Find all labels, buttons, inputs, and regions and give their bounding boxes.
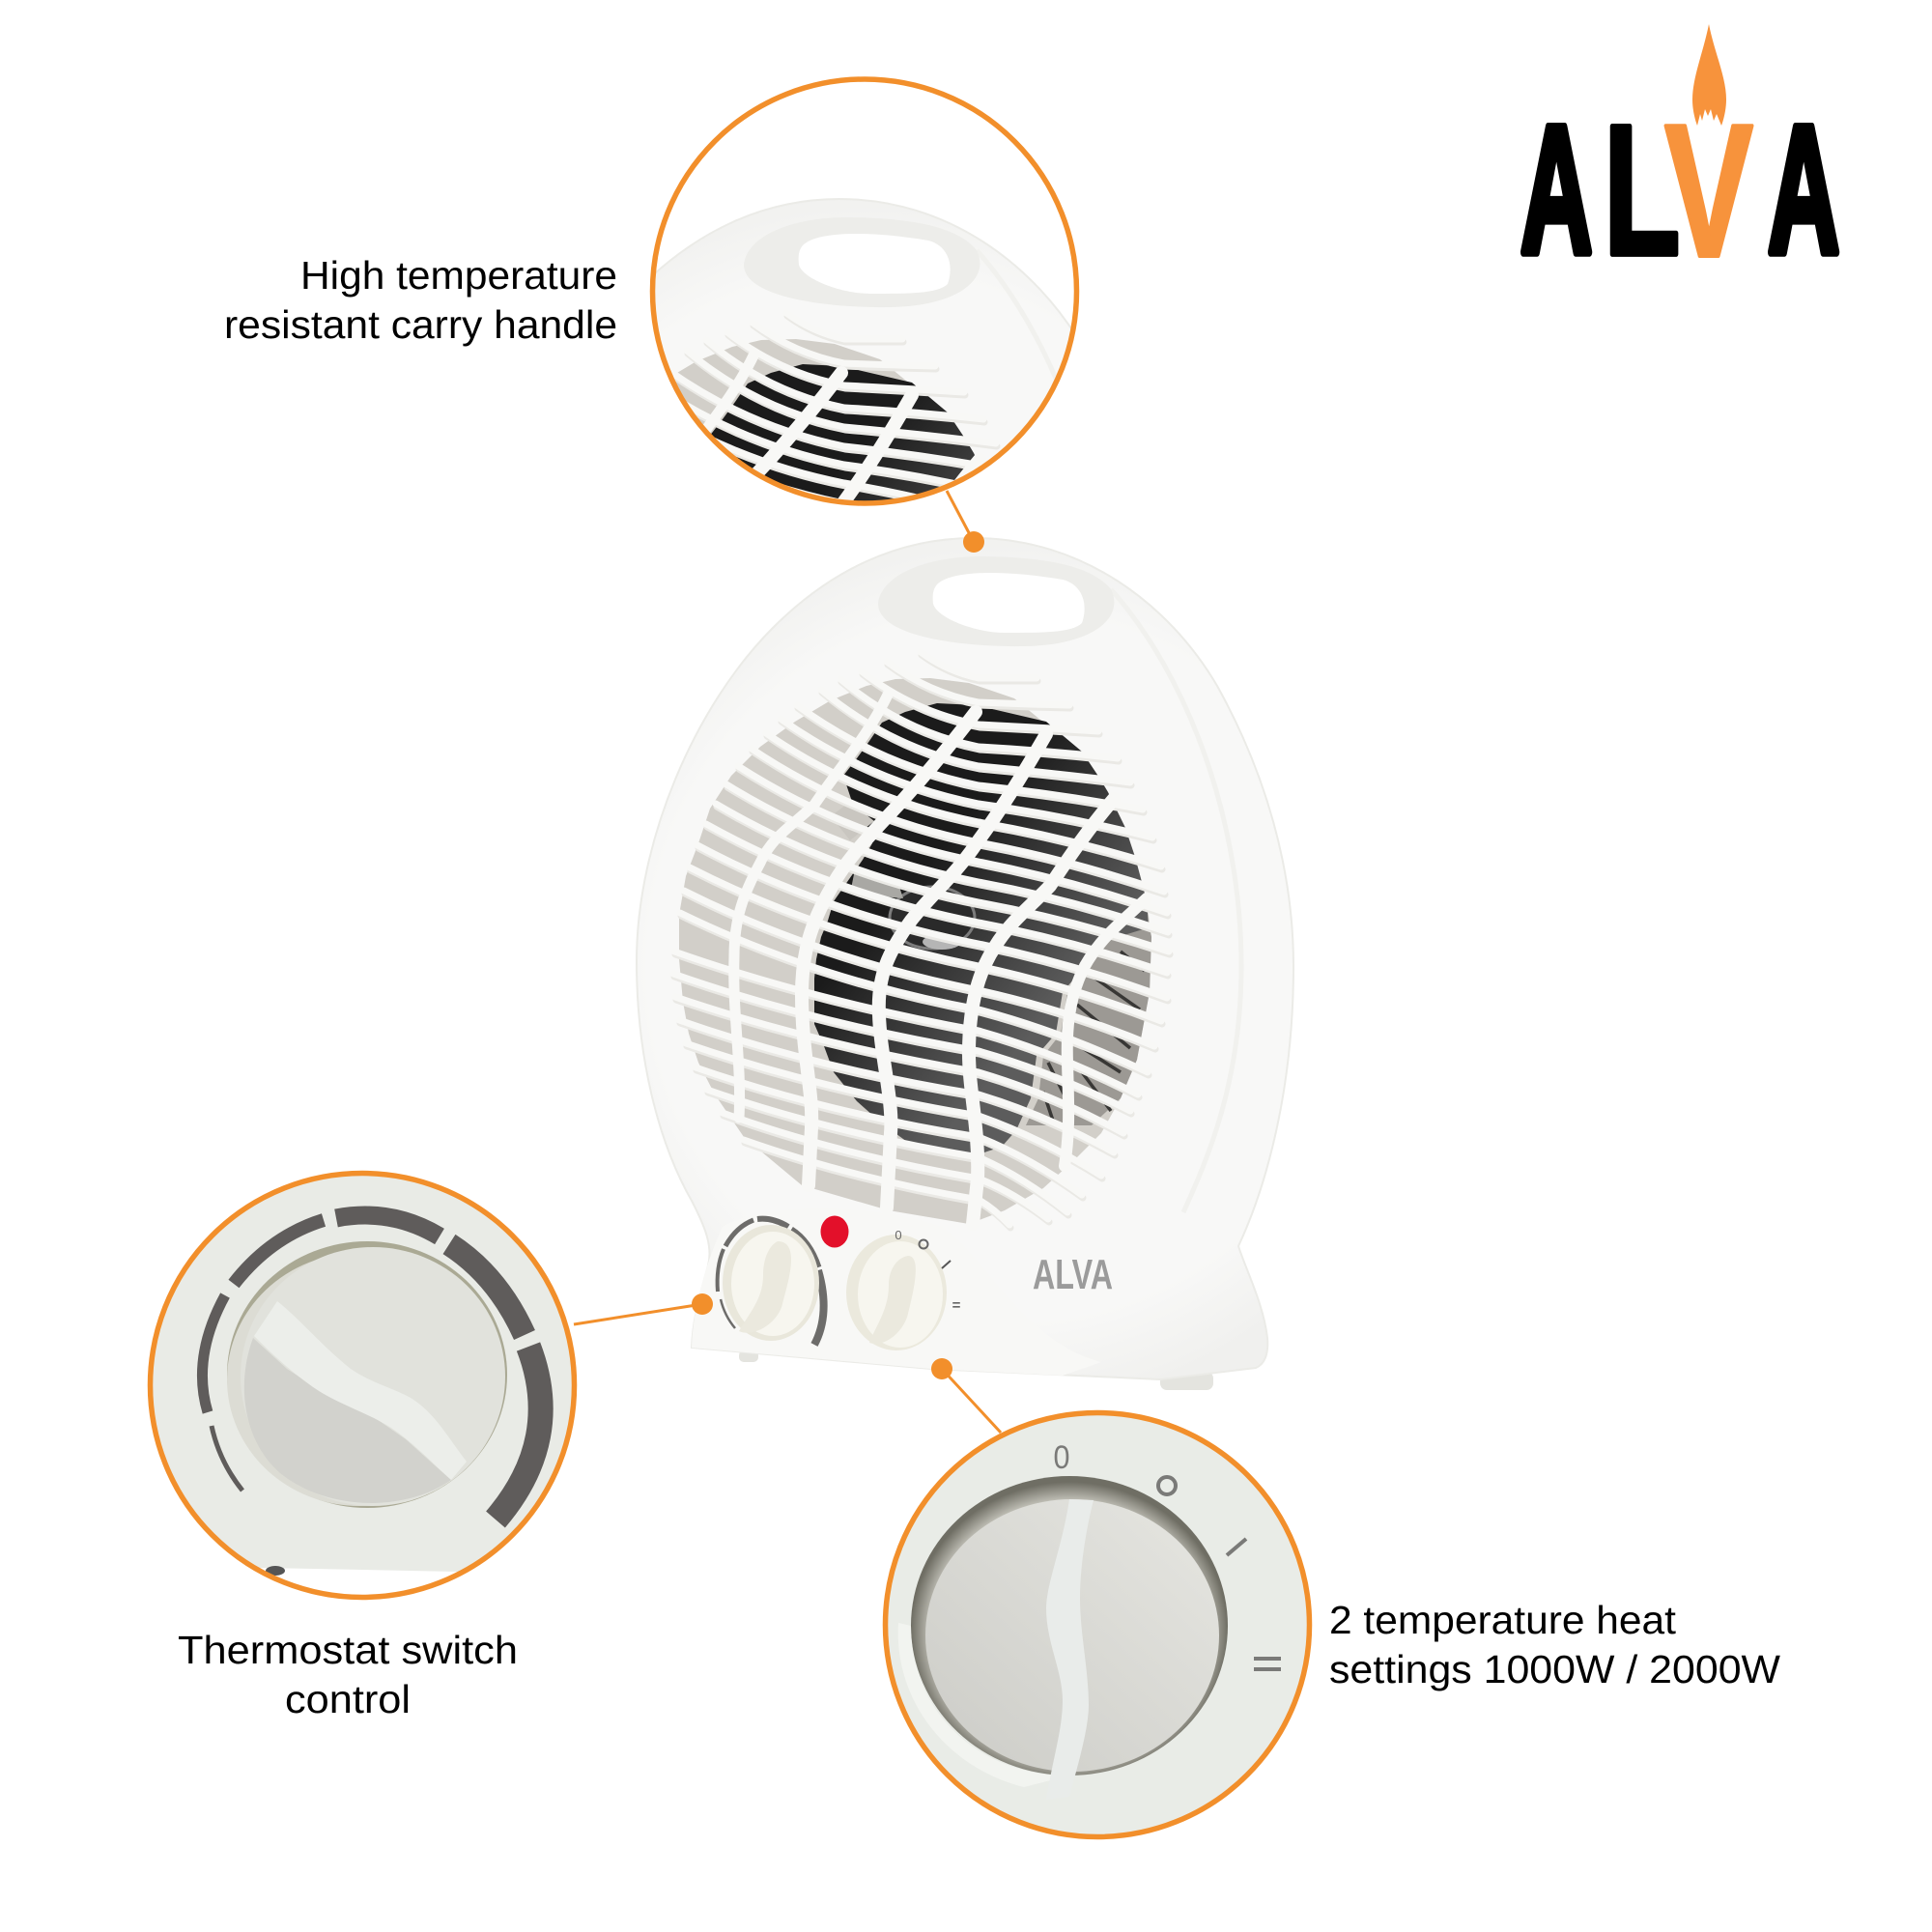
dial bezel xyxy=(227,1241,507,1508)
power indicator light xyxy=(821,1215,848,1248)
grille horizontal slats xyxy=(673,652,1169,1225)
callout text: heat settings xyxy=(1329,1598,1780,1691)
leader line and dot xyxy=(947,491,984,553)
callout text: carry handle xyxy=(224,253,617,347)
carry handle recess xyxy=(878,556,1114,646)
dial pointer xyxy=(254,1301,467,1480)
dial pointer xyxy=(1046,1499,1094,1800)
callout: heat settings xyxy=(884,1358,1311,1838)
inset: heat setting dial close-up xyxy=(884,1411,1311,1838)
dial markings: 0 xyxy=(1053,1439,1070,1476)
control panel xyxy=(692,1208,1101,1376)
fan hub xyxy=(831,802,975,950)
logo letters xyxy=(1520,85,1839,297)
logo letters: L xyxy=(1604,87,1680,294)
thermostat dial scale xyxy=(718,1219,824,1345)
logo letters: A xyxy=(1768,89,1839,292)
grille vertical ribs xyxy=(734,693,1147,1224)
callout text: heat settings: settings 1000W / 2000W xyxy=(1329,1647,1780,1691)
callout text: heat settings: 2 temperature heat xyxy=(1329,1598,1677,1642)
dial recess xyxy=(911,1476,1228,1776)
logo: ALVA xyxy=(1520,24,1839,297)
dark fan interior xyxy=(814,703,1150,1156)
logo letters: V xyxy=(1664,85,1753,297)
heater body xyxy=(637,538,1293,1379)
thermostat knob xyxy=(723,1225,819,1341)
dial markings xyxy=(1053,1439,1281,1669)
callout text: thermostat: control xyxy=(285,1677,411,1721)
callout text: carry handle: resistant carry handle xyxy=(224,302,617,347)
callout: carry handle xyxy=(649,76,1080,553)
slat shadow ridges xyxy=(674,655,1170,1228)
dial knob xyxy=(313,1247,505,1506)
inset: thermostat dial close-up xyxy=(153,1176,572,1576)
logo flame xyxy=(1692,24,1726,126)
leader line and dot xyxy=(931,1358,1001,1433)
dial knob xyxy=(925,1499,1219,1772)
dial scale xyxy=(202,1215,541,1520)
callout text: thermostat: Thermostat switch xyxy=(178,1628,518,1672)
heat setting markings: = xyxy=(952,1297,961,1314)
carry handle opening xyxy=(933,573,1085,633)
heating coil xyxy=(1026,927,1151,1125)
callout text: thermostat xyxy=(178,1628,518,1721)
heat setting markings: 0 xyxy=(895,1228,902,1242)
inset ring xyxy=(885,1412,1310,1837)
grille window xyxy=(679,678,1151,1224)
heater feet xyxy=(739,1350,1213,1390)
callout text: carry handle: High temperature xyxy=(300,253,617,298)
leader line and dot xyxy=(574,1293,713,1324)
front shell crease xyxy=(1111,589,1241,1212)
logo letters: A xyxy=(1520,89,1592,292)
callout: thermostat xyxy=(145,1172,713,1623)
heat setting markings xyxy=(895,1228,961,1314)
heat setting knob xyxy=(846,1235,947,1350)
inset ring xyxy=(653,79,1076,503)
inset: magnified carry handle xyxy=(655,198,1070,500)
inset ring xyxy=(151,1173,574,1598)
heater brand mark: ALVA xyxy=(1033,1251,1113,1298)
heater product photo xyxy=(637,538,1293,1390)
